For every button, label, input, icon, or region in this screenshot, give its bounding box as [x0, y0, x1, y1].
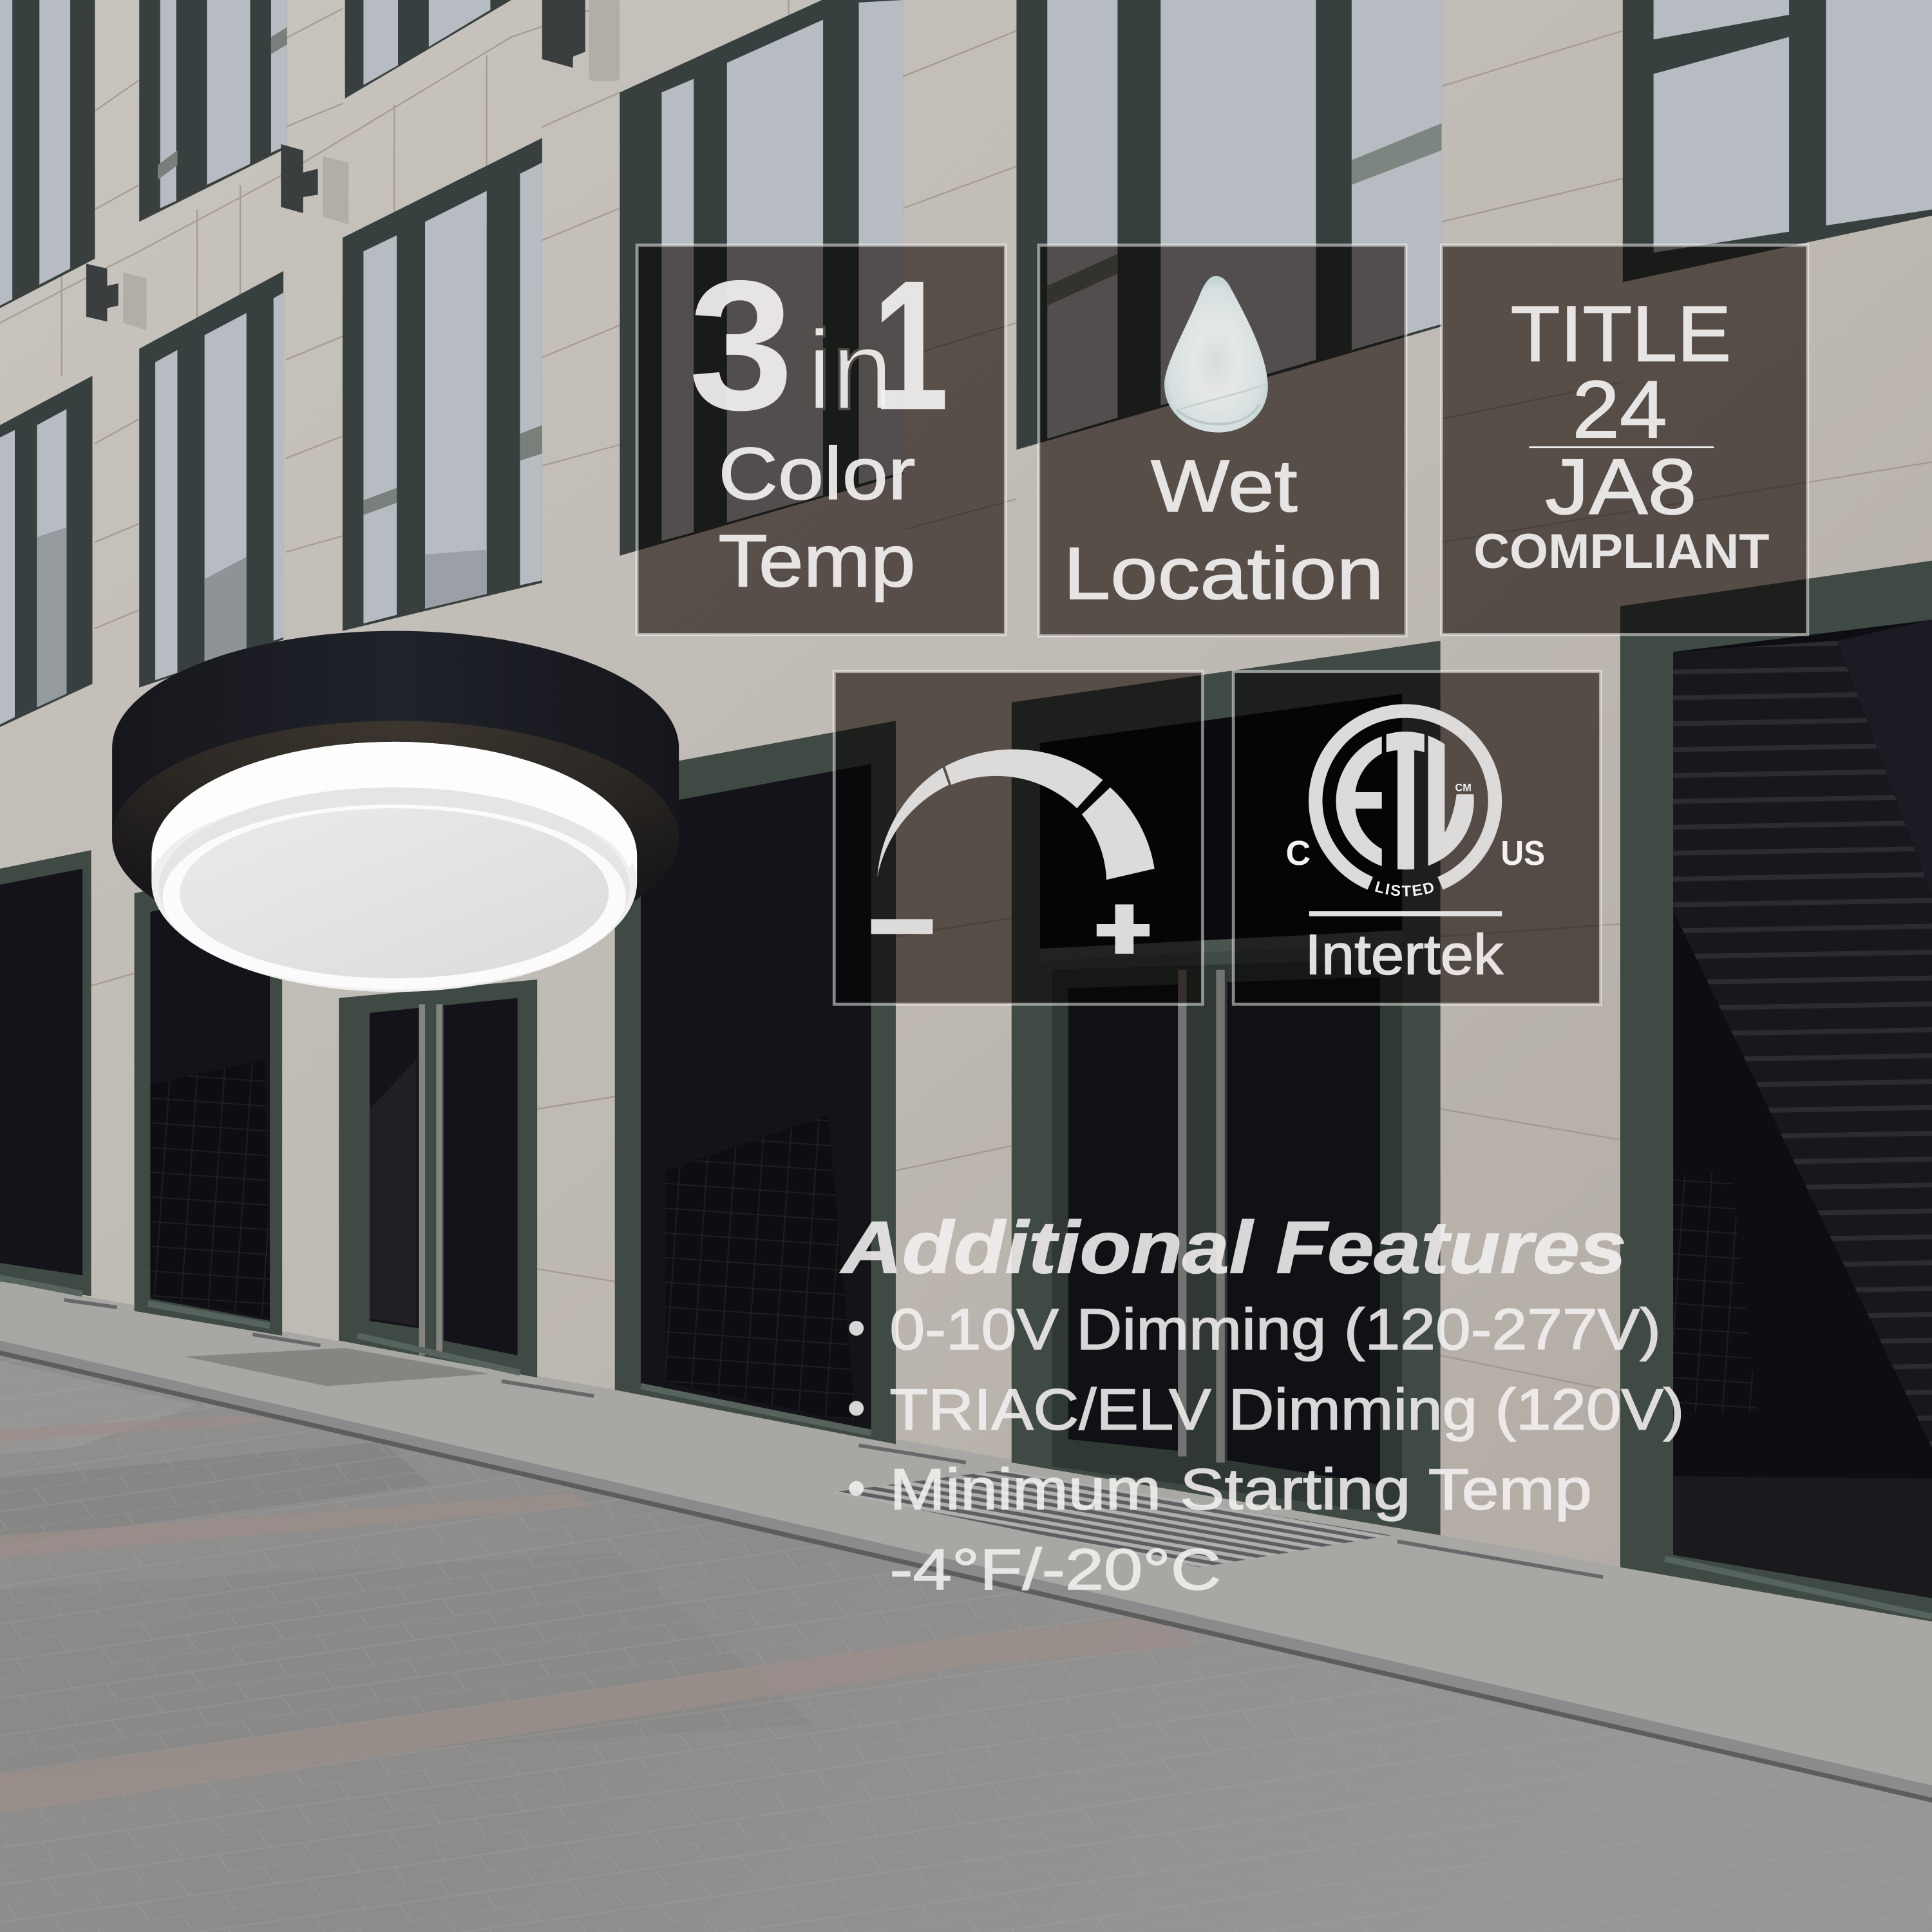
floor drain slots — [64, 1300, 1603, 1577]
additional features text — [839, 1206, 1684, 1602]
icon: ETL ring — [1316, 711, 1495, 884]
bullet: TRIAC: TRIAC/ELV Dimming (120V) — [889, 1378, 1684, 1442]
diffuser outer rim — [151, 773, 637, 992]
feature box: title 24 JA8 compliant — [1442, 245, 1808, 634]
bullet: 0-10V: 0-10V Dimming (120-277V) — [889, 1298, 1661, 1362]
sidewalk — [0, 1269, 1932, 1797]
inner band — [159, 788, 630, 987]
icon: minus — [871, 919, 933, 934]
plaza mottling and brick lines — [0, 1356, 1932, 1932]
feature box: ETL listed Intertek: LISTED — [1374, 881, 1434, 896]
feature box: wet location: Location — [1063, 533, 1384, 615]
lens disc — [180, 808, 609, 978]
underside ring — [112, 721, 679, 955]
feature box: title 24 JA8 compliant: TITLE — [1511, 290, 1731, 378]
feature box: dimmable gauge — [834, 672, 1202, 1004]
icon: dimmer arc — [877, 749, 1155, 880]
feature box: 3 in 1 color temp: Temp — [718, 520, 916, 603]
curb — [0, 1341, 1932, 1803]
door handles — [419, 1004, 442, 1356]
feature box: 3 in 1 color temp: in — [807, 307, 893, 433]
feature box: wet location — [1039, 245, 1406, 636]
bullet: minimum temp — [849, 1458, 1592, 1602]
feature box: title 24 JA8 compliant: COMPLIANT — [1473, 524, 1769, 579]
feature box: wet location: Wet — [1151, 445, 1298, 527]
feature box: ETL listed Intertek: US — [1501, 835, 1545, 873]
plaza pavement — [0, 1232, 1932, 1932]
icon: ETL letter marks — [1336, 732, 1474, 869]
feature box: ETL listed Intertek: CM — [1455, 782, 1472, 793]
glass reflections of towers — [150, 620, 1932, 1598]
window reflections and transoms — [37, 27, 1442, 707]
window sills — [0, 1278, 1932, 1616]
icon: plus — [1097, 904, 1150, 954]
ground floor frames — [0, 561, 1932, 1622]
ground floor dark glass — [0, 620, 1932, 1598]
feature box: 3 in 1 color temp — [637, 242, 1005, 634]
product: ceiling light — [112, 631, 679, 992]
feature box: title 24 JA8 compliant: JA8 — [1545, 442, 1697, 531]
pink paving bands — [0, 1414, 1195, 1814]
feature box: 3 in 1 color temp: 3 — [689, 242, 793, 448]
icon: water drop — [1164, 276, 1268, 433]
housing — [112, 631, 679, 955]
upper windows: frames — [0, 0, 1932, 727]
upper windows: glass — [0, 0, 1932, 724]
feature box: 3 in 1 color temp: Color — [718, 433, 916, 515]
bullet: minimum temp: Minimum Starting Temp — [889, 1458, 1592, 1522]
wall seams — [0, 0, 1932, 1392]
feature box: ETL listed Intertek: Intertek — [1305, 922, 1504, 986]
diffuser body — [151, 742, 637, 992]
feature box: ETL listed Intertek — [1231, 670, 1602, 1006]
upper glow crescent — [151, 742, 637, 869]
feature box: ETL listed Intertek: C — [1285, 835, 1311, 873]
main entrance door — [1040, 694, 1402, 1515]
floor grates — [185, 1348, 1391, 1567]
bullet: minimum temp: -4°F/-20°C — [889, 1538, 1221, 1602]
wall sconces — [86, 0, 620, 330]
heading: Additional Features — [839, 1206, 1627, 1289]
feature box: 3 in 1 color temp: 1 — [873, 242, 949, 448]
feature box: title 24 JA8 compliant: 24 — [1572, 364, 1667, 455]
glowing ring — [163, 804, 626, 989]
